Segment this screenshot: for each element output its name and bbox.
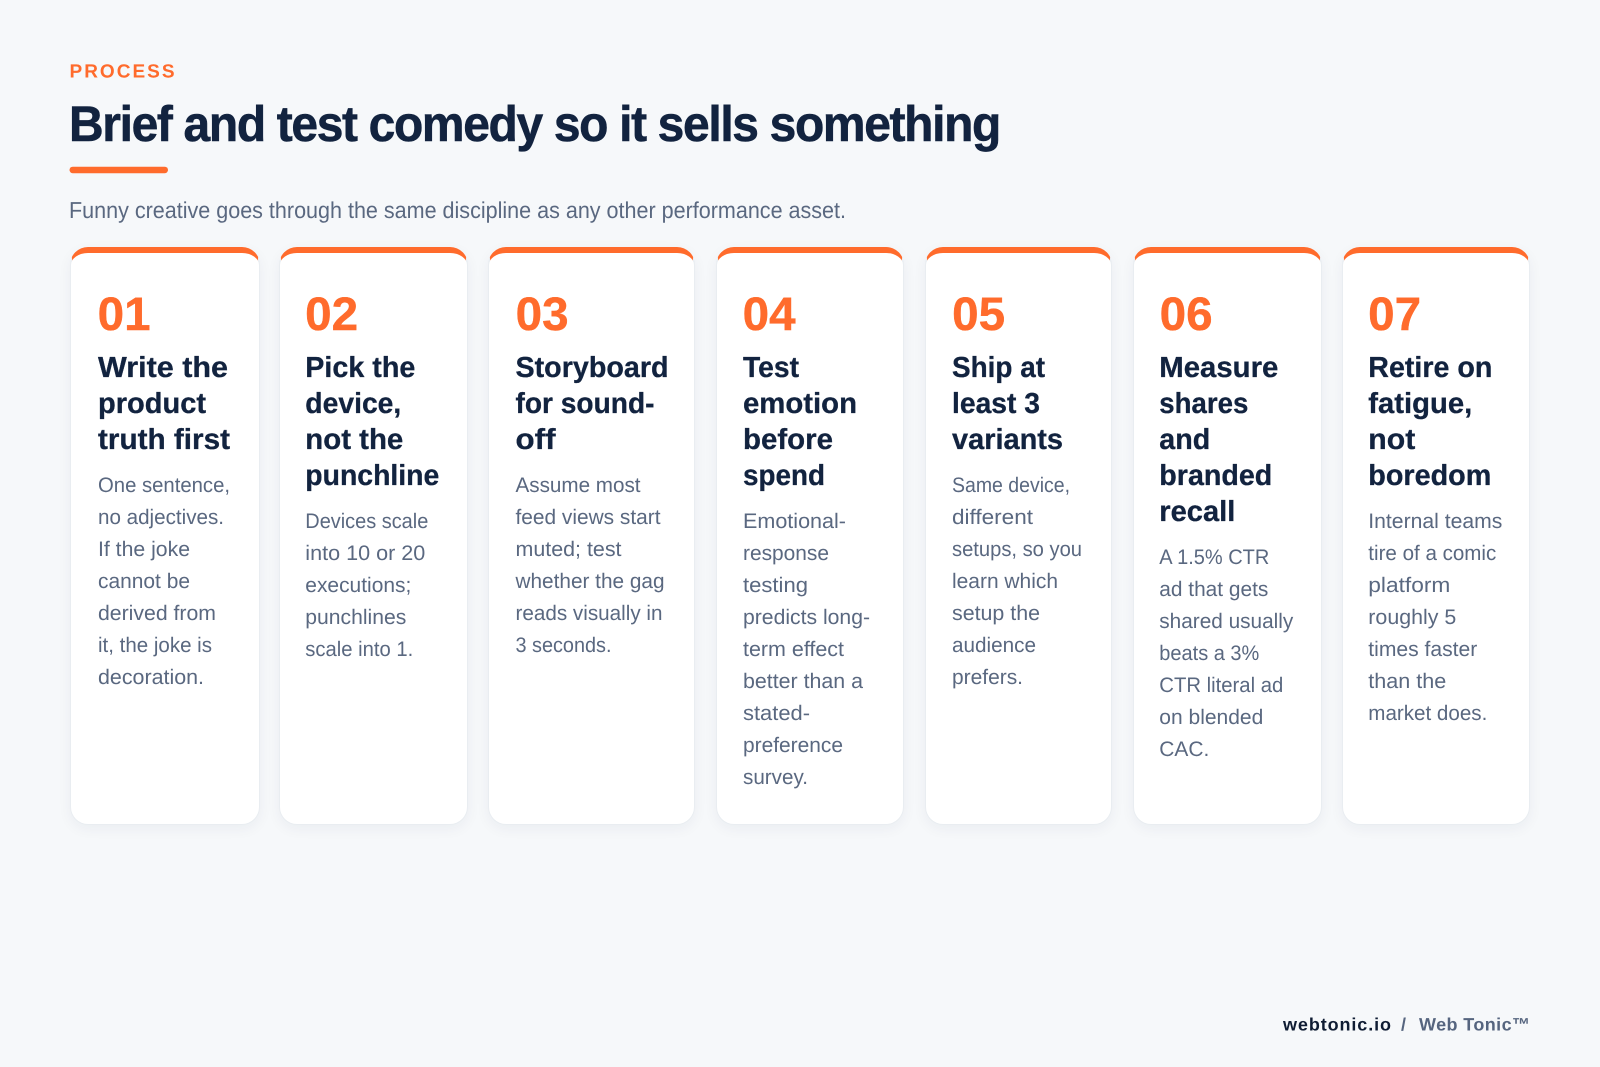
step title [306, 352, 440, 492]
header [69, 62, 1000, 223]
title: Brief and test comedy so it sells something [69, 96, 1000, 152]
step description: 3 seconds. [515, 634, 611, 657]
step description: reads visually in [515, 602, 662, 625]
step title: Storyboard [515, 352, 668, 384]
step description: setup the [952, 602, 1040, 625]
step description: survey. [742, 766, 808, 789]
step title [952, 352, 1062, 456]
step description: executions; [306, 574, 412, 597]
step description: stated- [742, 702, 810, 725]
step description: shared usually [1160, 610, 1294, 633]
step description: roughly 5 [1368, 606, 1456, 629]
step description: Internal teams [1368, 510, 1502, 533]
step description: Same device, [952, 474, 1070, 497]
step description: muted; test [515, 538, 621, 561]
step description: better than a [742, 670, 863, 693]
step title: before [742, 424, 832, 456]
step description: response [742, 542, 828, 565]
step description: Devices scale [306, 510, 429, 533]
step description: tire of a comic [1368, 542, 1496, 565]
step number: 01 [97, 287, 150, 340]
step title: fatigue, [1368, 388, 1472, 420]
panel: step 01 [70, 247, 260, 825]
step number: 03 [515, 287, 568, 340]
step description: ad that gets [1160, 578, 1269, 601]
step description: setups, so you [952, 538, 1082, 561]
step description [1368, 510, 1502, 725]
step title: not the [306, 424, 404, 456]
step description: it, the joke is [98, 634, 212, 657]
footer brand: Web Tonic™ [1419, 1014, 1530, 1034]
step description: into 10 or 20 [306, 542, 426, 565]
step description: learn which [952, 570, 1058, 593]
panel: step 07 [1342, 247, 1530, 825]
step title [742, 352, 856, 492]
step title: for sound- [515, 388, 654, 420]
step title: product [98, 388, 206, 420]
step description: A 1.5% CTR [1160, 546, 1270, 569]
step title: recall [1160, 496, 1236, 528]
step description: term effect [742, 638, 844, 661]
step title: Retire on [1368, 352, 1492, 384]
step description: CAC. [1160, 738, 1210, 761]
step description: times faster [1368, 638, 1477, 661]
step description [1160, 546, 1294, 761]
step title: and [1160, 424, 1211, 456]
step description: derived from [98, 602, 216, 625]
panel: step 02 [279, 247, 468, 825]
panel: step 03 [488, 247, 695, 825]
step description [952, 474, 1082, 689]
step title: not [1368, 424, 1415, 456]
step title: Pick the [306, 352, 416, 384]
step description: than the [1368, 670, 1446, 693]
panel: step 06 [1132, 247, 1322, 825]
panel: step 04 [716, 247, 904, 825]
step description: audience [952, 634, 1036, 657]
step description: cannot be [98, 570, 190, 593]
step description [306, 510, 429, 661]
eyebrow label: PROCESS [70, 62, 174, 83]
step title: spend [742, 460, 824, 492]
subtitle: Funny creative goes through the same discipline as any other performance asset. [69, 197, 846, 223]
step description [742, 510, 870, 789]
step title [1368, 352, 1492, 492]
step description: feed views start [515, 506, 660, 529]
step title: emotion [742, 388, 856, 420]
step description [514, 474, 664, 657]
step title: variants [952, 424, 1062, 456]
step description: CTR literal ad [1160, 674, 1284, 697]
step number: 06 [1160, 287, 1213, 340]
step description: testing [742, 574, 808, 597]
step description [98, 474, 230, 689]
step description: whether the gag [514, 570, 664, 593]
step description: predicts long- [742, 606, 870, 629]
step description: Assume most [515, 474, 640, 497]
step title: punchline [306, 460, 440, 492]
step number: 07 [1368, 287, 1421, 340]
step description: One sentence, [98, 474, 230, 497]
step title: Write the [98, 352, 228, 384]
step description: punchlines [306, 606, 407, 629]
step description: different [952, 506, 1033, 529]
step description: preference [742, 734, 842, 757]
step description: no adjectives. [98, 506, 224, 529]
step title: boredom [1368, 460, 1491, 492]
step number: 02 [305, 287, 358, 340]
footer site name: webtonic.io [1282, 1014, 1391, 1034]
step description: If the joke [98, 538, 190, 561]
step title: Measure [1160, 352, 1279, 384]
step title: Test [742, 352, 799, 384]
step title: branded [1160, 460, 1273, 492]
step description: platform [1368, 574, 1450, 597]
step title [1160, 352, 1279, 528]
step description: beats a 3% [1160, 642, 1260, 665]
step title: least 3 [952, 388, 1040, 420]
step title: truth first [98, 424, 230, 456]
step title: Ship at [952, 352, 1045, 384]
panel: step 05 [924, 247, 1112, 825]
step description: Emotional- [742, 510, 846, 533]
step title: off [515, 424, 555, 456]
step title [515, 352, 668, 456]
step description: on blended [1160, 706, 1264, 729]
step description: prefers. [952, 666, 1022, 689]
step title: device, [306, 388, 402, 420]
footer [1282, 1014, 1530, 1034]
step number: 04 [742, 287, 795, 340]
step title: shares [1160, 388, 1249, 420]
step description: market does. [1368, 702, 1487, 725]
step description: scale into 1. [306, 638, 414, 661]
step description: decoration. [98, 666, 204, 689]
step title [98, 352, 230, 456]
title underline [70, 167, 168, 173]
step number: 05 [952, 287, 1005, 340]
footer separator: / [1401, 1014, 1406, 1034]
